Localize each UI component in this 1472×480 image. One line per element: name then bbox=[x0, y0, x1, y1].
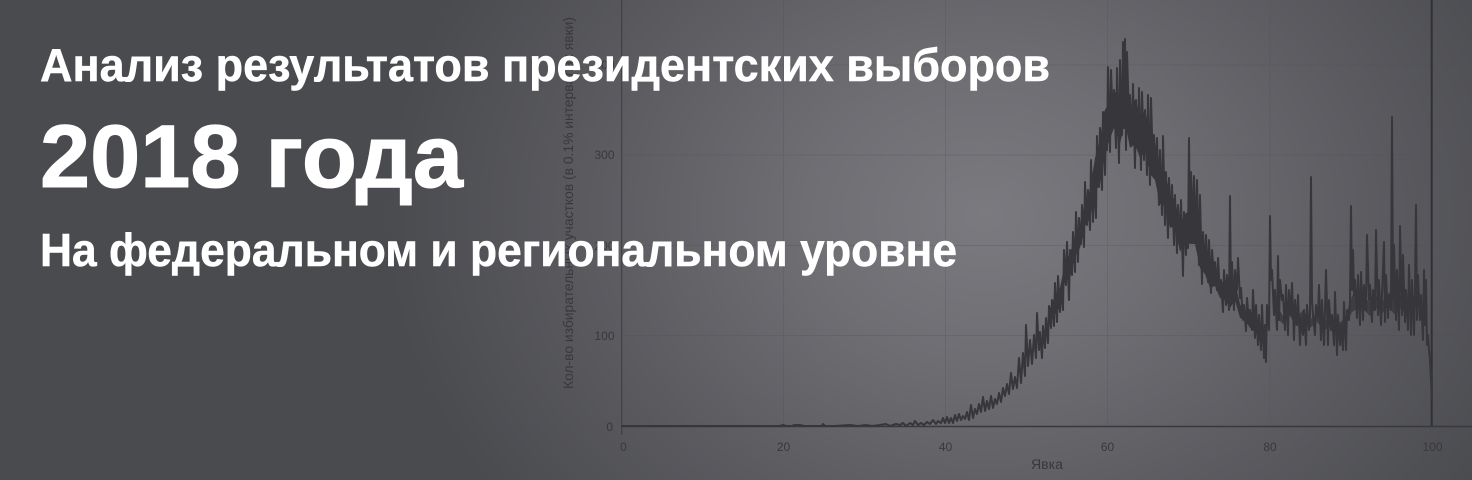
data line dense core bbox=[1050, 82, 1265, 345]
x axis tick labels: 20 bbox=[777, 440, 790, 454]
y axis tick labels: 300 bbox=[594, 148, 615, 162]
y axis tick labels: 200 bbox=[594, 239, 615, 253]
x axis tick labels: 80 bbox=[1263, 440, 1277, 454]
y axis title: Кол-во избирательных участков (в 0.1% интервалах явки) bbox=[561, 17, 576, 389]
100 percent marker line bbox=[1431, 0, 1433, 426]
x axis tick labels: 40 bbox=[939, 440, 952, 454]
title block bbox=[40, 39, 1050, 276]
x axis tick labels: 0 bbox=[620, 440, 627, 454]
x axis tick labels: 100 bbox=[1422, 440, 1443, 454]
data line bbox=[621, 39, 1432, 426]
x axis tick labels bbox=[620, 440, 1443, 454]
y axis tick labels: 100 bbox=[594, 329, 615, 343]
y axis bbox=[621, 0, 623, 435]
line chart: turnout distribution bbox=[561, 0, 1472, 472]
data line noise band on the right bbox=[1277, 288, 1418, 332]
x axis bbox=[621, 426, 1472, 428]
title line 1: Анализ результатов президентских выборов bbox=[40, 39, 1050, 91]
y axis tick labels: 0 bbox=[606, 420, 613, 434]
title line 2: year: 2018 года bbox=[40, 106, 465, 206]
y axis tick labels bbox=[594, 58, 615, 434]
x axis tick labels: 60 bbox=[1101, 440, 1114, 454]
subtitle: На федеральном и региональном уровне bbox=[40, 224, 957, 276]
y axis tick labels: 400 bbox=[594, 58, 615, 72]
x axis title: Явка bbox=[1031, 457, 1064, 472]
